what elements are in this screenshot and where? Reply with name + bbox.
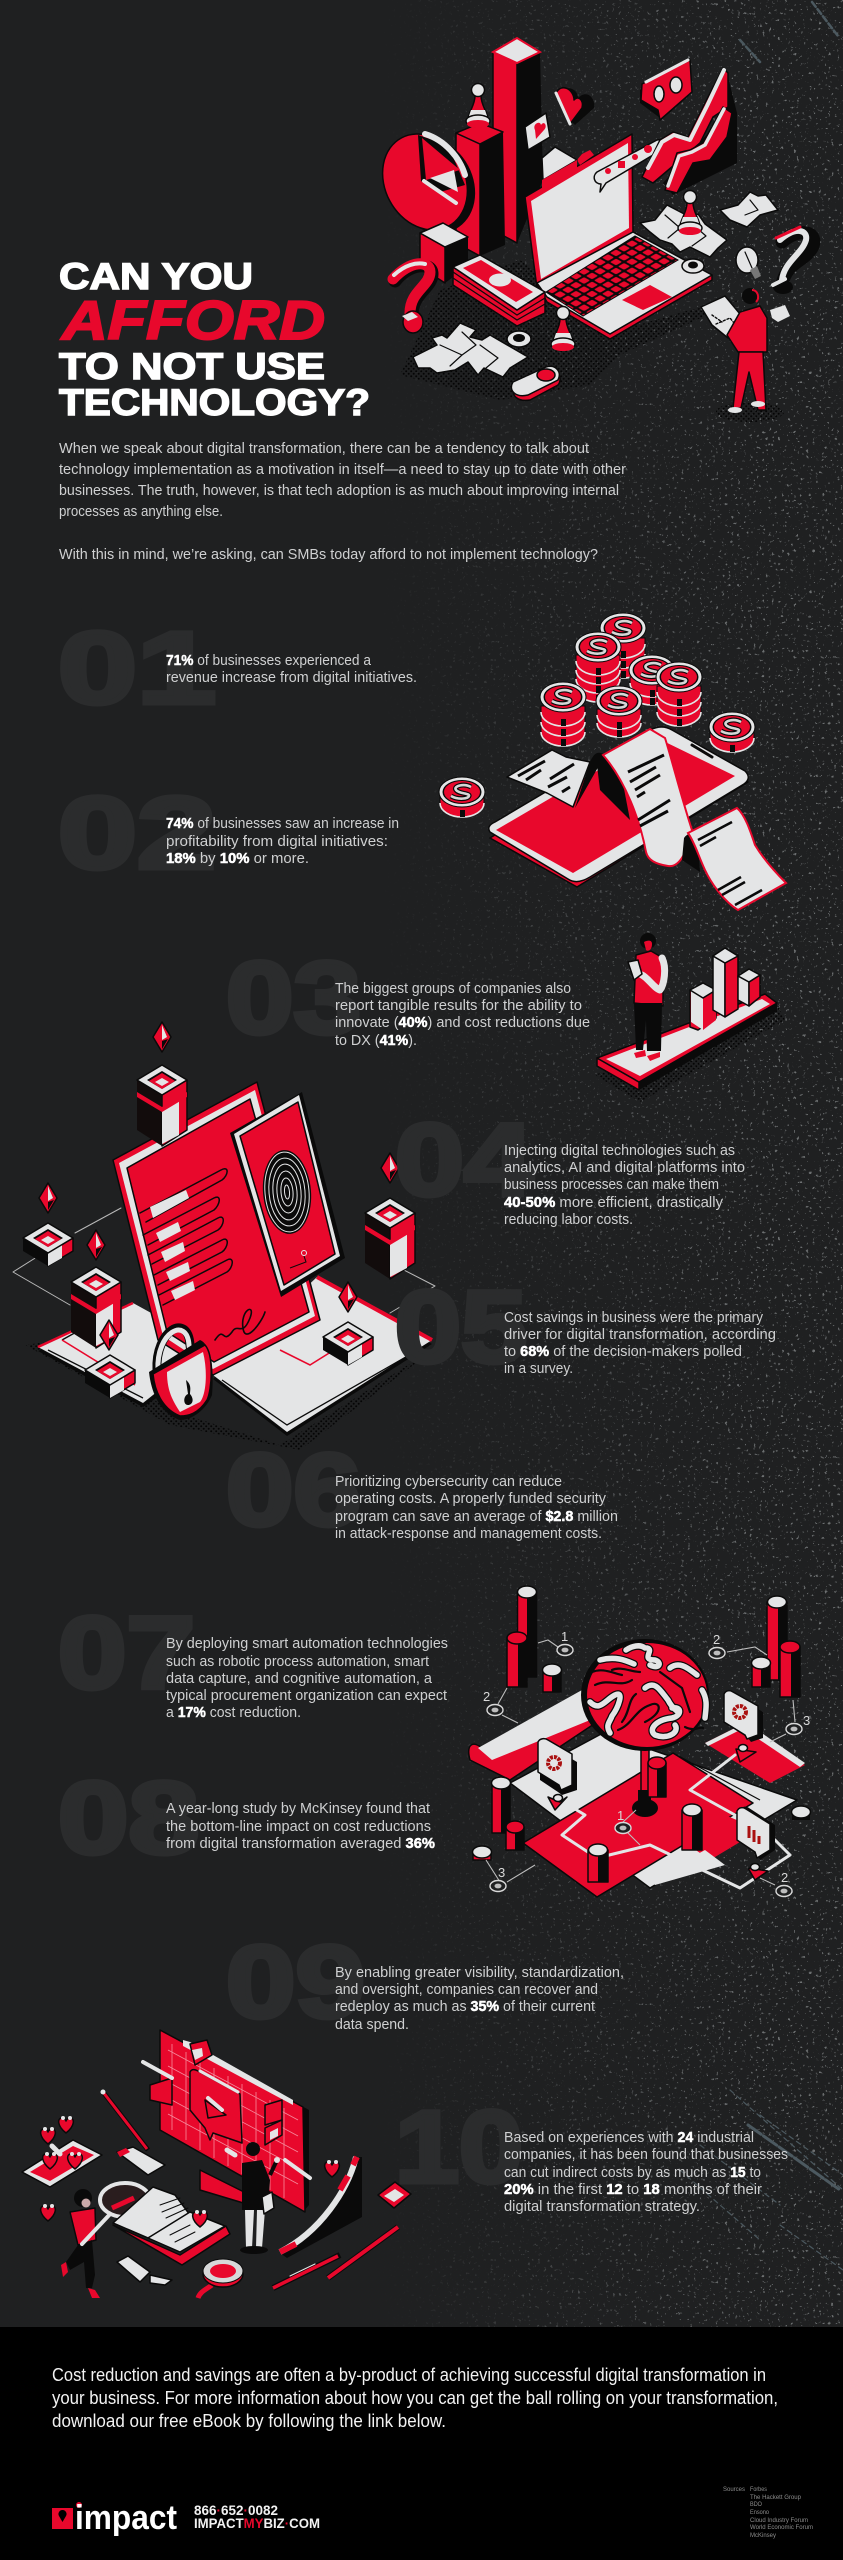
fingerprint phone [230, 1092, 345, 1297]
stat 04: 04 [395, 1103, 533, 1217]
stat 07: such as robotic process automation, smart [166, 1653, 430, 1670]
stat 01: revenue increase from digital initiatives. [166, 669, 417, 686]
brain stem [632, 1740, 658, 1817]
stat 01: 71% of businesses experienced a [166, 652, 372, 669]
illustration: document, fingerprint phone and padlock [13, 1022, 440, 1450]
contact details: 866·652·0082 [194, 2502, 278, 2518]
right question mark [773, 227, 814, 294]
closing statement: download our free eBook by following the link below. [52, 2411, 446, 2431]
stat 09: and oversight, companies can recover and [335, 1981, 598, 1998]
pie chart [366, 119, 492, 248]
base plate [38, 1277, 432, 1436]
stat 05: to 68% of the decision-makers polled [504, 1343, 742, 1360]
tall bar [493, 38, 543, 243]
document [113, 1082, 320, 1375]
stat 09: redeploy as much as 35% of their current [335, 1998, 596, 2015]
impact logo: impact [75, 2499, 177, 2537]
stat 08: A year-long study by McKinsey found that [166, 1800, 431, 1817]
middle bar with pawn [456, 84, 505, 256]
left question mark [393, 263, 432, 333]
note and pointing hand [117, 2256, 172, 2285]
stat 02 [58, 776, 399, 890]
numbered callouts: 3 [498, 1865, 505, 1880]
monitor [143, 2030, 310, 2212]
title: CAN YOU [59, 256, 253, 297]
stat 04: 40-50% more efficient, drastically [504, 1194, 723, 1211]
closing statement: your business. For more information about how you can get the ball rolling on your transformation, [52, 2388, 778, 2408]
stat 04: business processes can make them [504, 1176, 719, 1193]
bars [690, 948, 760, 1030]
stat 06: in attack-response and management costs. [335, 1525, 602, 1542]
intro text: businesses. The truth, however, is that tech adoption is as much about improving internal [59, 482, 619, 499]
background scratch texture [420, 0, 843, 2327]
hollow cubes and gems [23, 1022, 415, 1398]
title: TO NOT USE [59, 346, 325, 387]
stat 07: typical procurement organization can expect [166, 1687, 448, 1704]
pointer tokens [548, 1744, 768, 1880]
stat 05: 05 [395, 1270, 527, 1384]
title [59, 256, 370, 423]
signature [215, 1309, 265, 1340]
laptop base and keyboard [537, 232, 712, 339]
stat 05: driver for digital transformation, according [504, 1326, 776, 1343]
numbered callouts: 3 [803, 1713, 810, 1728]
numbered callouts [483, 1629, 810, 1896]
footer panel [0, 2327, 843, 2560]
circuit traces [560, 1753, 790, 1888]
heart icon [556, 88, 594, 125]
light bulb [736, 247, 761, 279]
intro text: processes as anything else. [59, 503, 223, 520]
stat 06: Prioritizing cybersecurity can reduce [335, 1473, 562, 1490]
stat 03: 03 [226, 941, 361, 1055]
stat 10: companies, it has been found that businesses [504, 2146, 788, 2163]
stat 02: 02 [58, 776, 216, 890]
platform [597, 994, 777, 1090]
stat 10 [395, 2090, 788, 2215]
curved ruler [280, 2157, 362, 2258]
speech bubble with icons [640, 60, 692, 120]
person reading a map [701, 288, 767, 413]
sources: BDO [750, 2502, 762, 2508]
stat 10: digital transformation strategy. [504, 2198, 700, 2215]
sources: Ensono [750, 2510, 770, 2516]
speech bubbles [538, 1691, 775, 1860]
cylinders [472, 1586, 810, 1882]
stat 08: 08 [58, 1761, 199, 1875]
stat 03: to DX (41%). [335, 1032, 417, 1049]
stat 03: The biggest groups of companies also [335, 980, 571, 997]
sources [723, 2487, 813, 2539]
stat 01: 01 [58, 611, 216, 725]
title: TECHNOLOGY? [59, 382, 370, 423]
illustration: brain and automation plates [469, 1586, 810, 1897]
pen and paper [100, 2090, 165, 2175]
sources: World Economic Forum [750, 2525, 813, 2531]
small gift box [378, 2182, 411, 2208]
intro text: With this in mind, we’re asking, can SMBs today afford to not implement technology? [59, 546, 598, 563]
stat 07 [58, 1596, 448, 1721]
stat 05: in a survey. [504, 1360, 573, 1377]
pens [273, 2227, 398, 2288]
stat 07: 07 [58, 1596, 195, 1710]
stat 04: analytics, AI and digital platforms into [504, 1159, 745, 1176]
illustration: monitor, people, book and tools [22, 2030, 411, 2298]
stat 06 [226, 1433, 618, 1547]
padlock [149, 1328, 213, 1420]
stat 10: can cut indirect costs by as much as 15 to [504, 2164, 761, 2181]
stat 03 [226, 941, 590, 1055]
stat 07: data capture, and cognitive automation, a [166, 1670, 433, 1687]
closing statement [52, 2365, 778, 2431]
intro text [59, 440, 626, 563]
phone with hearts [22, 2116, 339, 2221]
dotted ground shadows [400, 260, 784, 422]
stat 05: Cost savings in business were the primary [504, 1309, 763, 1326]
stat 07: a 17% cost reduction. [166, 1704, 301, 1721]
man in front of monitor [240, 2142, 280, 2254]
sources: McKinsey [750, 2533, 776, 2539]
stat 04 [395, 1103, 745, 1228]
sources: Forbes [750, 2487, 767, 2493]
stat 06: 06 [226, 1433, 361, 1547]
illustration: coins and phone with receipt [439, 613, 786, 910]
brain [581, 1639, 709, 1751]
laptop screen [525, 134, 633, 288]
sources: Sources [723, 2487, 745, 2493]
coin stacks [439, 613, 755, 817]
stat 08: the bottom-line impact on cost reductions [166, 1818, 431, 1835]
stat 03: innovate (40%) and cost reductions due [335, 1014, 590, 1031]
sources: The Hackett Group [750, 2495, 802, 2501]
money stack [453, 255, 545, 326]
stat 10: 20% in the first 12 to 18 months of their [504, 2181, 762, 2198]
sources: Cloud Industry Forum [750, 2518, 808, 2524]
stat 02: 18% by 10% or more. [166, 850, 309, 867]
connector lines [13, 1208, 435, 1313]
stat 09: By enabling greater visibility, standardization, [335, 1964, 624, 1981]
numbered callouts: 2 [713, 1632, 720, 1647]
stat 02: 74% of businesses saw an increase in [166, 815, 399, 832]
stat 10: Based on experiences with 24 industrial [504, 2129, 754, 2146]
plates [469, 1690, 805, 1897]
intro text: When we speak about digital transformation, there can be a tendency to talk about [59, 440, 590, 457]
fingerprint [259, 1148, 315, 1236]
contact details [194, 2502, 320, 2531]
receipt [507, 729, 786, 910]
stat 09: 09 [226, 1925, 365, 2039]
tape roll [198, 2259, 243, 2298]
contact details: IMPACTMYBIZ·COM [194, 2515, 320, 2531]
numbered callouts: 2 [781, 1870, 788, 1885]
numbered callouts: 1 [561, 1629, 568, 1644]
wavy ribbon chart [642, 68, 737, 195]
puzzle pieces [413, 192, 790, 377]
form rows [140, 1169, 232, 1305]
stat 06: operating costs. A properly funded security [335, 1490, 606, 1507]
numbered callouts: 2 [483, 1689, 490, 1704]
illustration: person with bar chart [595, 933, 785, 1102]
open book [113, 2187, 230, 2265]
stat 06: program can save an average of $2.8 million [335, 1508, 618, 1525]
hero illustration: laptop, charts and puzzle [366, 38, 814, 422]
stat 08: from digital transformation averaged 36% [166, 1835, 435, 1852]
closing statement: Cost reduction and savings are often a by-product of achieving successful digital transformation in [52, 2365, 766, 2385]
small ring and toggle button [507, 331, 560, 400]
comment bubble on screen [594, 140, 662, 192]
stat 08 [58, 1761, 435, 1875]
stat 04: reducing labor costs. [504, 1211, 633, 1228]
stat 10: 10 [395, 2090, 523, 2204]
stat 02: profitability from digital initiatives: [166, 833, 388, 850]
heart card [525, 113, 550, 150]
stat 09 [226, 1925, 624, 2039]
numbered callouts: 1 [617, 1808, 624, 1823]
person [628, 933, 665, 1061]
stat 03: report tangible results for the ability to [335, 997, 582, 1014]
small block [420, 223, 468, 283]
stat 05 [395, 1270, 776, 1384]
phone [489, 727, 748, 887]
stat 07: By deploying smart automation technologies [166, 1635, 448, 1652]
intro text: technology implementation as a motivation in itself—a need to stay up to date with other [59, 461, 626, 478]
person with magnifying glass [61, 2183, 150, 2298]
stat 04: Injecting digital technologies such as [504, 1142, 735, 1159]
stat 01 [58, 611, 417, 725]
stat 09: data spend. [335, 2016, 409, 2033]
chess pawns [551, 190, 702, 351]
title: AFFORD [60, 289, 325, 351]
